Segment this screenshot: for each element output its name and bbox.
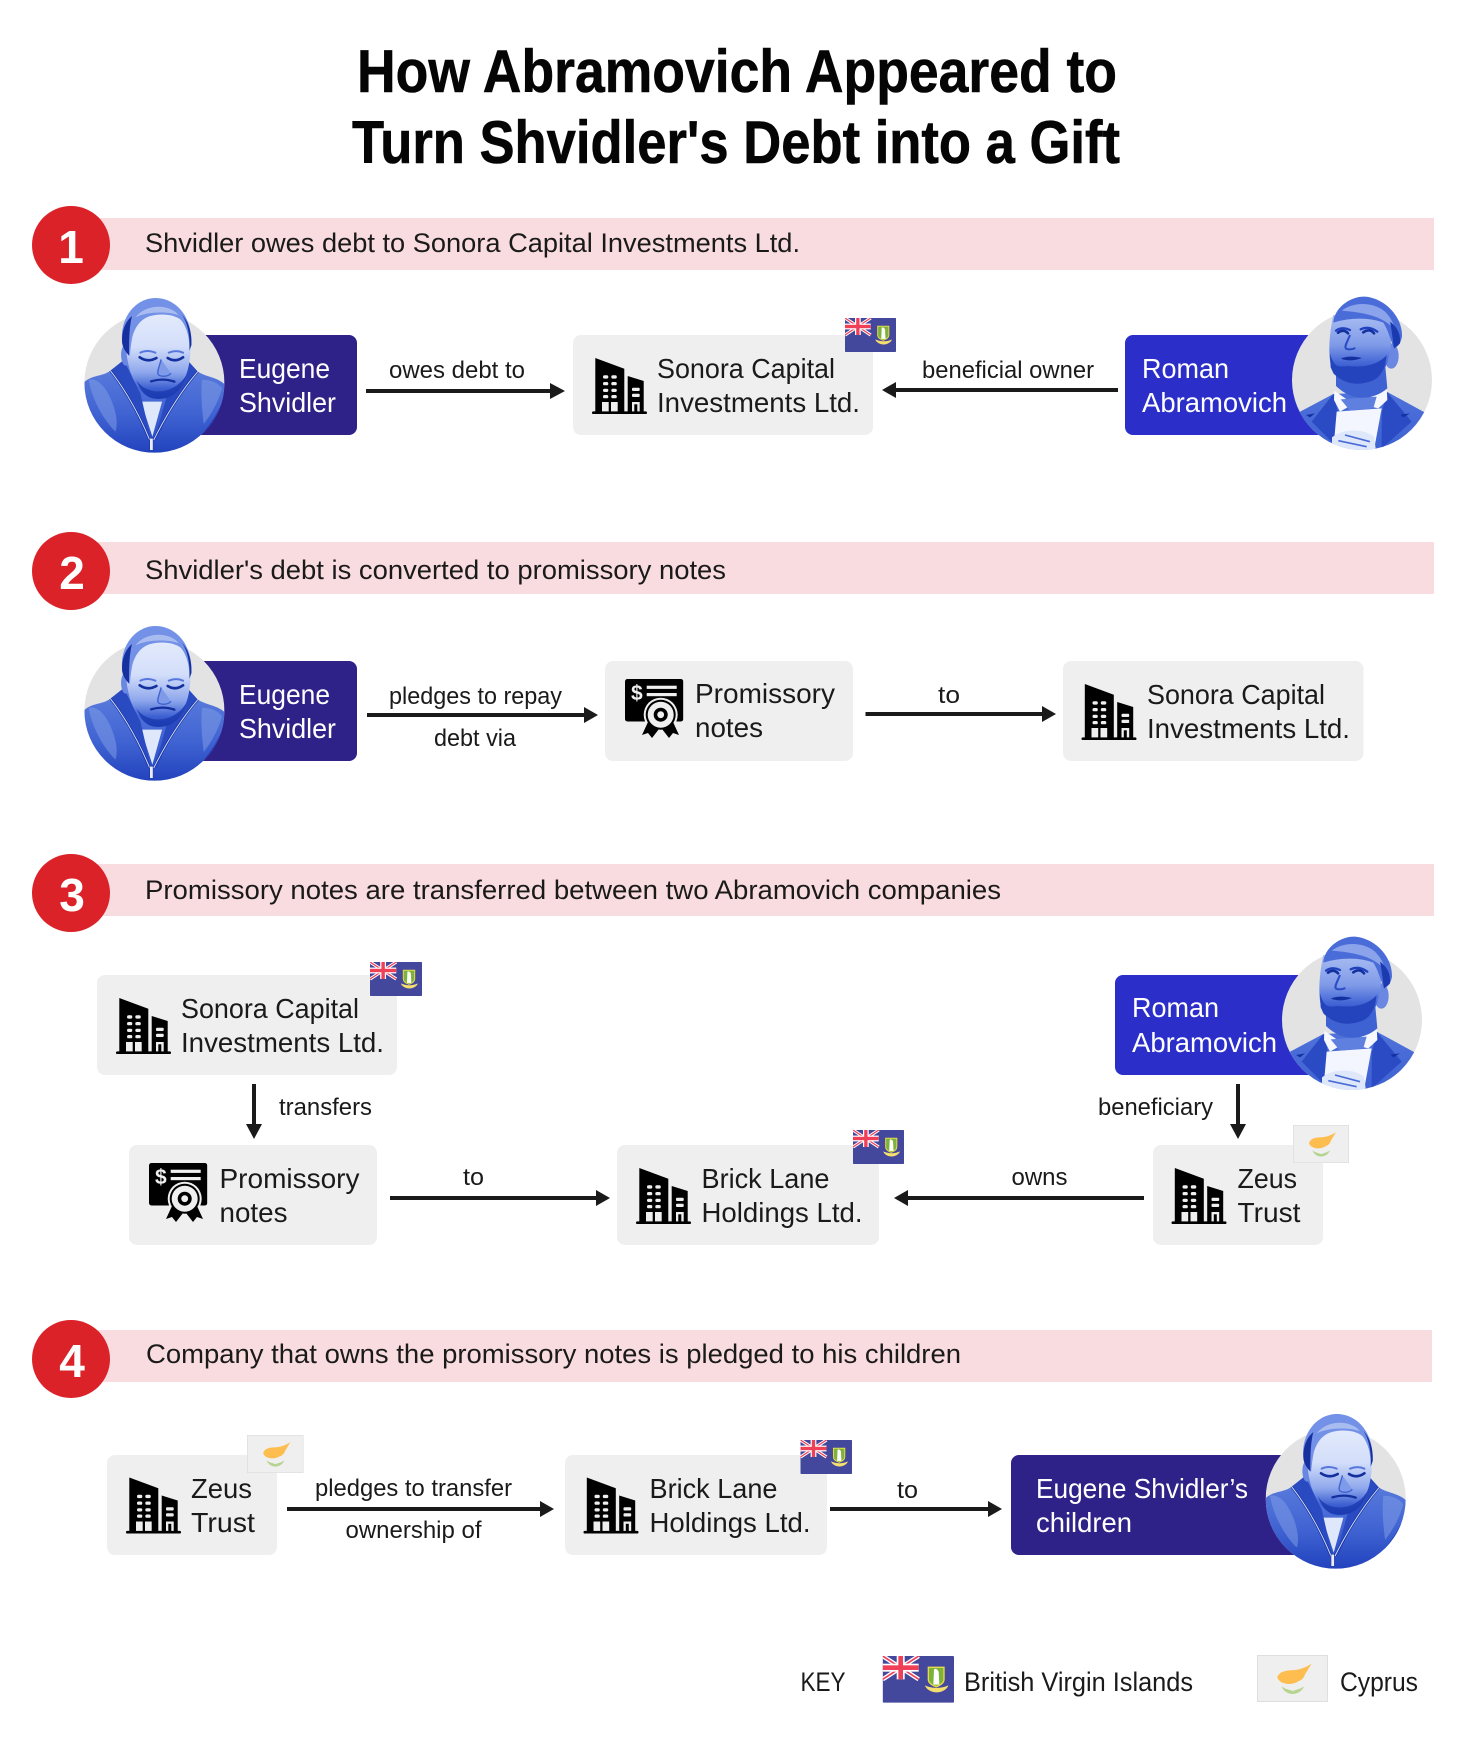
- person: Roman Abramovich: Abramovich: [1142, 387, 1287, 418]
- arrow: pledges to transfer ownership of: pledges to transfer: [315, 1475, 512, 1502]
- step 3 number badge: [32, 854, 110, 932]
- company: Brick Lane Holdings Ltd.: Holdings Ltd.: [650, 1507, 810, 1538]
- arrow: transfers: transfers: [279, 1094, 372, 1121]
- recipient: Eugene Shvidler's children: Eugene Shvidler’s: [1036, 1473, 1248, 1504]
- instrument: promissory notes: Promissory: [695, 678, 835, 709]
- company: Brick Lane Holdings Ltd.: [565, 1440, 852, 1555]
- arrow: beneficial owner: beneficial owner: [922, 357, 1094, 384]
- step 2 number badge: 2: [59, 547, 85, 599]
- company: Sonora Capital Investments Ltd.: [573, 318, 896, 435]
- person: Roman Abramovich: Roman: [1142, 353, 1229, 384]
- company: Zeus Trust: Trust: [1238, 1197, 1301, 1228]
- company: Sonora Capital Investments Ltd.: Sonora Capital: [181, 993, 359, 1024]
- person: Eugene Shvidler: Eugene: [239, 353, 330, 384]
- person: Eugene Shvidler: [84, 298, 357, 453]
- recipient: Eugene Shvidler's children: children: [1036, 1507, 1132, 1538]
- panel: step 3: [32, 854, 1434, 1245]
- instrument: promissory notes: [605, 661, 853, 761]
- title: How Abramovich Appeared to: [357, 38, 1117, 105]
- person: Roman Abramovich: Roman: [1132, 992, 1219, 1023]
- company: Sonora Capital Investments Ltd.: [97, 962, 422, 1075]
- key label: KEY: [800, 1667, 846, 1697]
- company: Sonora Capital Investments Ltd.: Investments Ltd.: [1147, 713, 1350, 744]
- instrument: promissory notes: notes: [695, 712, 763, 743]
- arrow: pledges to repay debt via: debt via: [434, 725, 517, 752]
- step 1 number badge: 1: [58, 221, 84, 273]
- company: Sonora Capital Investments Ltd.: Investments Ltd.: [181, 1027, 384, 1058]
- recipient: Eugene Shvidler's children: [1011, 1414, 1406, 1569]
- company: Zeus Trust: [107, 1435, 303, 1555]
- company: Brick Lane Holdings Ltd.: [617, 1130, 904, 1245]
- company: Zeus Trust: Zeus: [1238, 1163, 1297, 1194]
- arrow: owns: owns: [1012, 1164, 1068, 1191]
- key: British Virgin Islands: [883, 1656, 1193, 1703]
- panel: step 2: [32, 532, 1434, 781]
- person: Eugene Shvidler: [84, 626, 357, 781]
- arrow: pledges to transfer ownership of: [287, 1475, 554, 1544]
- step 1 number badge: [32, 206, 110, 284]
- arrow: to: [866, 682, 1056, 722]
- arrow: transfers: [246, 1084, 372, 1139]
- arrow: to: to: [897, 1477, 918, 1504]
- instrument: promissory notes: notes: [220, 1197, 288, 1228]
- company: Sonora Capital Investments Ltd.: Sonora Capital: [1147, 679, 1325, 710]
- company: Zeus Trust: Trust: [191, 1507, 255, 1538]
- panel: step 1: [32, 206, 1434, 453]
- arrow: pledges to repay debt via: [367, 683, 598, 752]
- step 2 number badge: [32, 532, 110, 610]
- step 3 heading: Promissory notes are transferred between two Abramovich companies: [145, 875, 1001, 905]
- title: Turn Shvidler's Debt into a Gift: [352, 109, 1120, 176]
- arrow: beneficial owner: [882, 357, 1118, 398]
- key: British Virgin Islands: British Virgin Islands: [964, 1667, 1193, 1697]
- company: Brick Lane Holdings Ltd.: Brick Lane: [702, 1163, 830, 1194]
- panel: step 4: [32, 1320, 1432, 1569]
- step 4 number badge: [32, 1320, 110, 1398]
- step 2 heading: Shvidler's debt is converted to promissory notes: [145, 555, 726, 585]
- key: Cyprus: Cyprus: [1340, 1667, 1418, 1697]
- company: Sonora Capital Investments Ltd.: Investments Ltd.: [657, 387, 860, 418]
- arrow: to: [390, 1164, 610, 1206]
- step 4 heading: Company that owns the promissory notes is pledged to his children: [146, 1339, 961, 1369]
- arrow: owes debt to: owes debt to: [389, 357, 525, 384]
- person: Roman Abramovich: Abramovich: [1132, 1027, 1277, 1058]
- step 1 heading: Shvidler owes debt to Sonora Capital Investments Ltd.: [145, 228, 800, 258]
- company: Zeus Trust: Zeus: [191, 1473, 252, 1504]
- step 3 number badge: 3: [59, 869, 85, 921]
- step 2 header band: [90, 542, 1434, 594]
- arrow: to: to: [463, 1164, 484, 1191]
- arrow: to: to: [938, 682, 960, 709]
- step 3 header band: [90, 864, 1434, 916]
- company: Brick Lane Holdings Ltd.: Brick Lane: [650, 1473, 778, 1504]
- arrow: pledges to transfer ownership of: ownership of: [346, 1517, 482, 1544]
- person: Roman Abramovich: [1115, 937, 1422, 1093]
- company: Brick Lane Holdings Ltd.: Holdings Ltd.: [702, 1197, 862, 1228]
- company: Sonora Capital Investments Ltd.: [1063, 661, 1364, 761]
- instrument: promissory notes: [129, 1145, 377, 1245]
- legend: key: [800, 1655, 1418, 1703]
- title: [352, 38, 1120, 176]
- arrow: beneficiary: [1098, 1084, 1246, 1139]
- key: Cyprus: [1257, 1655, 1418, 1702]
- arrow: beneficiary: beneficiary: [1098, 1094, 1213, 1121]
- arrow: to: [830, 1477, 1002, 1517]
- step 1 header band: [90, 218, 1434, 270]
- person: Eugene Shvidler: Shvidler: [239, 387, 336, 418]
- person: Roman Abramovich: [1125, 297, 1432, 453]
- arrow: owns: [894, 1164, 1144, 1206]
- step 4 number badge: 4: [59, 1335, 85, 1387]
- step 4 header band: [90, 1330, 1432, 1382]
- person: Eugene Shvidler: Eugene: [239, 679, 330, 710]
- person: Eugene Shvidler: Shvidler: [239, 713, 336, 744]
- instrument: promissory notes: Promissory: [220, 1163, 360, 1194]
- arrow: pledges to repay debt via: pledges to repay: [389, 683, 562, 710]
- company: Sonora Capital Investments Ltd.: Sonora Capital: [657, 353, 835, 384]
- company: Zeus Trust: [1153, 1125, 1349, 1245]
- arrow: owes debt to: [366, 357, 565, 399]
